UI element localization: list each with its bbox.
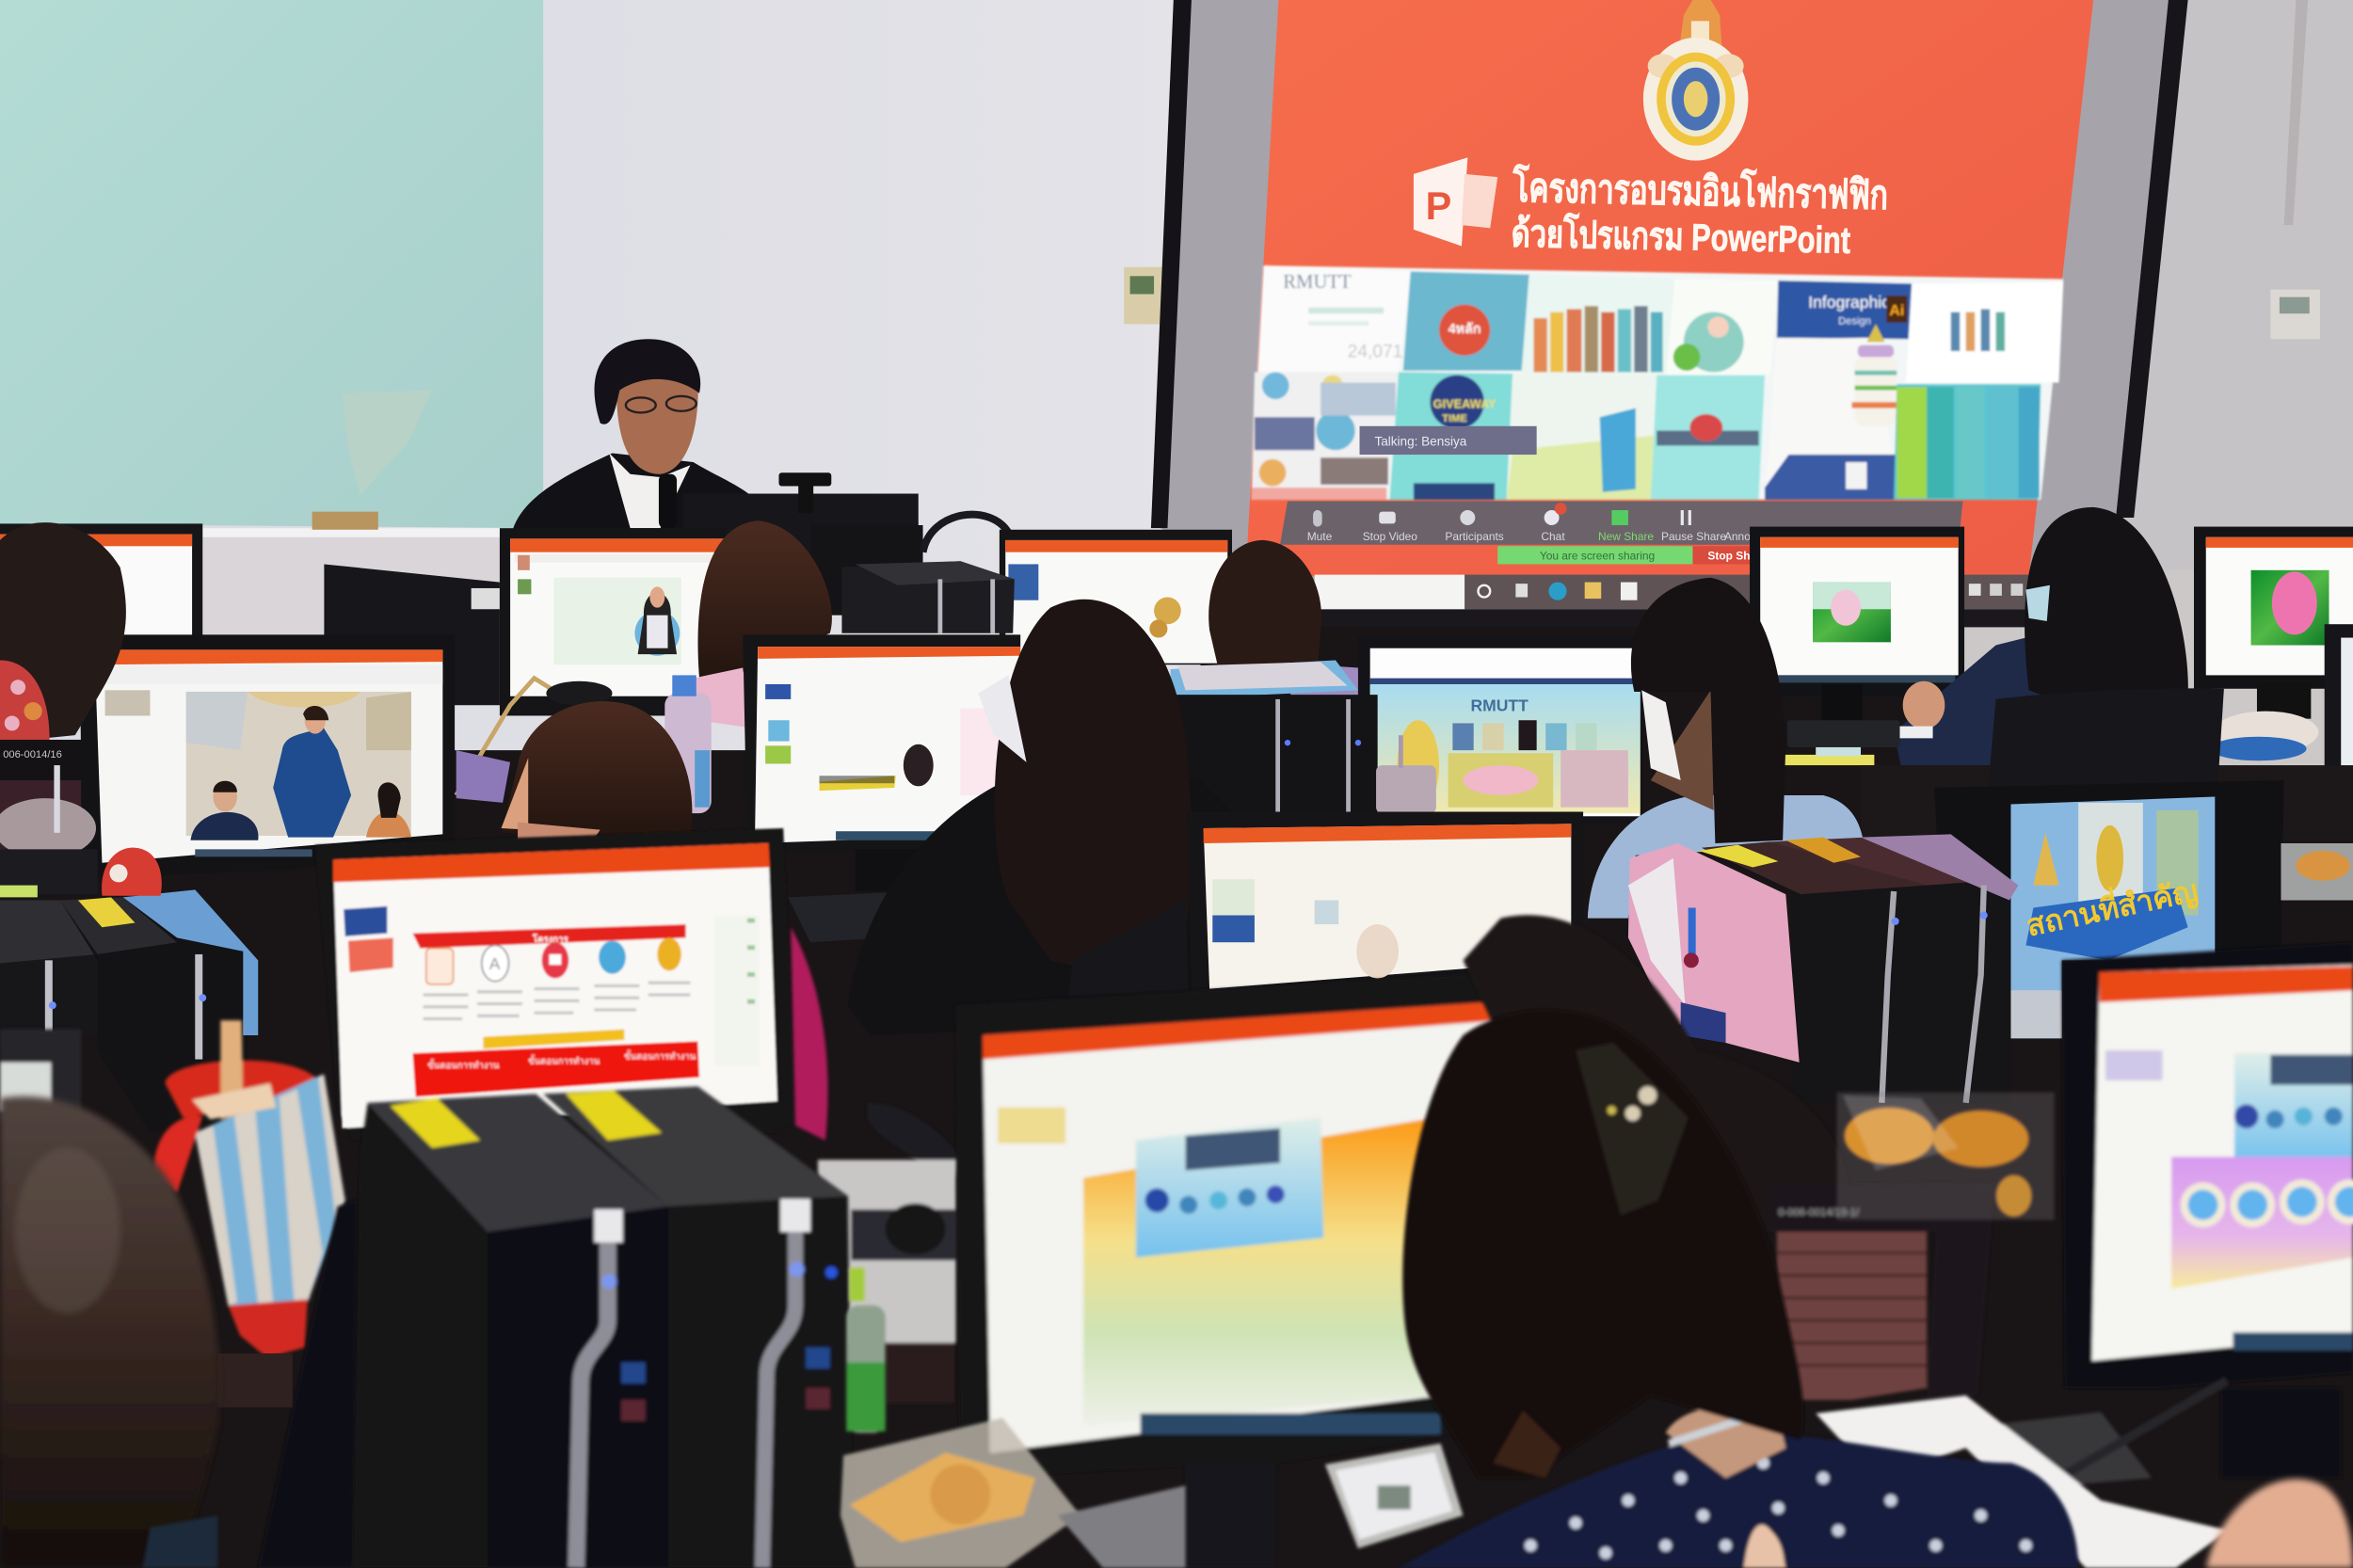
monitor: red layout slide: ขั้นตอนการทำงาน (624, 1050, 696, 1063)
monitor: second row centre (743, 634, 1020, 891)
monitor: front gradient slide (956, 967, 1603, 1568)
keyboard and items: right desk (1785, 712, 2353, 840)
slide title: โครงการอบรมอินโฟกราฟฟิก (1512, 163, 1889, 218)
slide title (1511, 163, 1889, 262)
monitor: red layout slide (315, 828, 795, 1141)
woman: back row centre (1209, 540, 1373, 705)
speaker face (616, 361, 698, 474)
speaker at the front (513, 339, 750, 535)
silver strips (576, 1215, 608, 1568)
woman: front-left head (0, 1096, 219, 1568)
whiteboard (0, 0, 543, 537)
monitor: red layout slide: ขั้นตอนการทำงาน (427, 1059, 500, 1071)
arm and bracelet (1666, 1405, 1785, 1478)
muffin trays (1837, 1093, 2055, 1220)
long hair (1402, 1010, 1803, 1478)
screen sharing banner (1497, 546, 1768, 564)
zoom toolbar: Annotate (1724, 530, 1769, 543)
infographic thumbnails: 24,071 (1348, 342, 1402, 361)
flight attendant photo (186, 692, 411, 840)
small monitor fragment left (0, 1030, 81, 1123)
floor object left (142, 1515, 217, 1568)
chair label and cups left: 006-0014/16 (3, 749, 62, 760)
tote bag: striped (153, 1020, 345, 1358)
monitor: lotus slide right (1750, 527, 1964, 723)
speaker hair (595, 339, 700, 424)
projected slide (1245, 0, 2093, 576)
infographic thumbnails: RMUTT (1283, 272, 1352, 293)
chair back (1769, 1182, 1994, 1399)
woman: navy jacket far right (1894, 507, 2188, 790)
woman: black dress and long hair (848, 600, 1230, 1035)
zoom toolbar: Stop Video (1363, 530, 1417, 543)
woman: front with polka-dot dress (1399, 1010, 2078, 1568)
purple cup (1376, 735, 1436, 813)
PC tower pair: front centre (353, 1086, 853, 1568)
woman behind monitor: pink top (694, 520, 832, 728)
tower: centre with blue book (1171, 660, 1378, 811)
zoom toolbar (1280, 501, 1962, 545)
monitor: red layout slide: A (489, 954, 501, 973)
zoom toolbar: Pause Share (1661, 530, 1726, 543)
wall thermostat panels (1124, 267, 2320, 339)
icon: PowerPoint logo (1414, 157, 1497, 246)
handbag chain (456, 679, 613, 803)
green water bottle (846, 1268, 886, 1433)
zoom toolbar: Mute (1307, 530, 1333, 543)
front monitor back: left (258, 1200, 357, 1568)
knee right (2206, 1479, 2353, 1568)
monitor: front right gradient slide (2062, 942, 2353, 1478)
monitor: third row centre (1187, 811, 1583, 993)
windows taskbar (1315, 575, 2032, 609)
instructor desk and monitor (324, 472, 1008, 705)
talking tooltip (1360, 426, 1537, 455)
infographic thumbnails: Design (1838, 315, 1871, 327)
pink bag (1628, 843, 1800, 1063)
microphone (659, 474, 677, 528)
infographic thumbnails: Ai (1889, 303, 1904, 319)
polka-dot dress (1399, 1432, 2078, 1568)
monitor: back row left (0, 523, 202, 639)
talking tooltip: Talking: Bensiya (1374, 434, 1467, 448)
infographic thumbnails: GIVEAWAY (1433, 397, 1497, 411)
infographic thumbnails (1252, 265, 2063, 500)
zoom toolbar: Participants (1445, 530, 1504, 543)
glasses (626, 396, 696, 412)
zoom toolbar: Chat (1541, 530, 1565, 543)
hair clip (1576, 1043, 1689, 1215)
screen sharing banner: Stop Share (1707, 550, 1768, 563)
second row monitor: website (1358, 636, 1643, 824)
monitor: temple photo slide (1934, 780, 2284, 1038)
chair and dark desk area (818, 1103, 960, 1403)
second row monitor: website: RMUTT (1470, 696, 1529, 715)
infographic thumbnails: Infographic (1808, 293, 1890, 312)
keyboard: centre desk (788, 891, 916, 942)
tower pair and blue box: left (0, 849, 258, 1133)
emblem (1643, 0, 1748, 161)
yellow labels (391, 1098, 480, 1148)
food packs right (2281, 843, 2353, 901)
slide title: ด้วยโปรแกรม PowerPoint (1511, 211, 1851, 262)
monitor: red layout slide: ขั้นตอนการทำงาน (528, 1054, 600, 1066)
monitor: temple photo slide: สถานที่สำคัญ (2023, 869, 2201, 944)
office chair right (1989, 688, 2224, 786)
red cap toy (102, 848, 162, 896)
monitor: far right lotus slide (2194, 527, 2353, 808)
woman: behind, hair and striped top (1464, 915, 1994, 1400)
papers on desk (1816, 1381, 2229, 1568)
woman: behind, hair and striped top: 0-006-0014/19-1/ (1778, 1207, 1860, 1218)
icon: PowerPoint logo: P (1426, 184, 1451, 228)
wall: back wall (0, 0, 2353, 780)
water bottle (664, 675, 712, 813)
monitor: red layout slide: โครงการ (532, 934, 568, 945)
infographic thumbnails: 4หลัก (1449, 322, 1481, 337)
chair label and cups left (0, 740, 96, 858)
infographic thumbnails: TIME (1442, 413, 1467, 424)
desk surface: left (217, 1353, 293, 1407)
monitor: airline photo slide (80, 634, 455, 878)
monitor: presenter slide with portrait (500, 528, 725, 715)
woman: brown hair between monitors (502, 701, 692, 840)
LEDs and ports (601, 1274, 616, 1288)
towers: right with pink bag (1628, 834, 2018, 1103)
pink sleeve (791, 927, 828, 1141)
laptop corner (1058, 1485, 1186, 1568)
projection screen (1151, 0, 2188, 627)
zoom toolbar: New Share (1598, 530, 1654, 543)
woman: ponytail and light blue shirt (1588, 578, 1864, 919)
striped shirt (1777, 1229, 1927, 1400)
speaker suit (513, 453, 750, 535)
screen surround (1156, 0, 2184, 623)
snack tray: front (840, 1418, 1080, 1568)
smartphone (1325, 1444, 1464, 1548)
monitor: back row centre (1000, 530, 1232, 664)
woman: back row left with floral top (0, 522, 126, 743)
screen sharing banner: You are screen sharing (1540, 550, 1655, 563)
small tower: back row (841, 561, 1015, 633)
